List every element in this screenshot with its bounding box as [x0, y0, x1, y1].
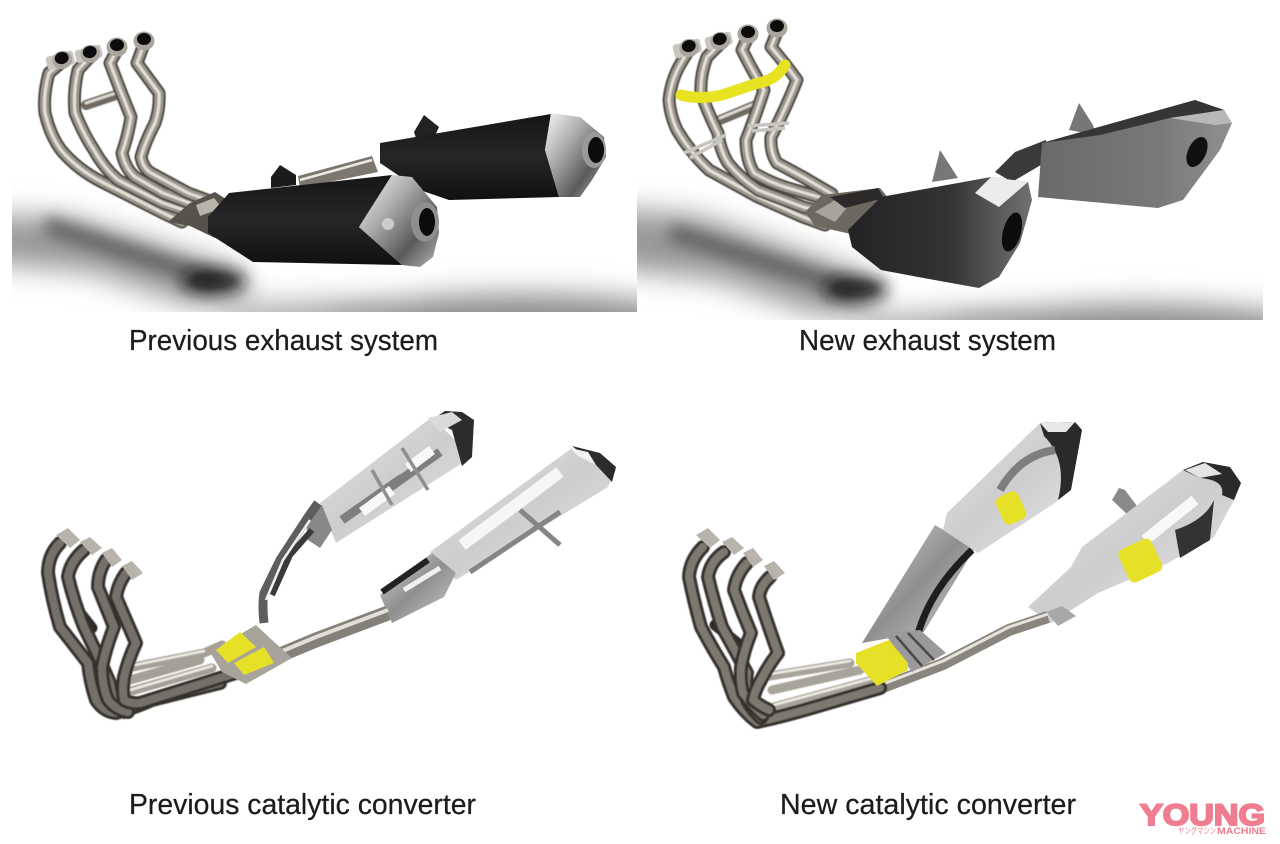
flanges — [696, 528, 785, 580]
yellow balance pipe — [681, 65, 785, 98]
clamp — [885, 630, 946, 672]
header pipes — [689, 547, 880, 722]
front muffler — [848, 150, 1032, 288]
caption: New exhaust system — [799, 325, 1056, 357]
header pipes — [48, 543, 236, 713]
connection box — [805, 188, 890, 236]
panel: previous exhaust system — [0, 32, 720, 362]
header pipes — [669, 32, 832, 225]
top silencer — [263, 411, 474, 623]
logo: Young Machine: MACHINE — [1217, 826, 1266, 836]
flanges — [56, 528, 143, 580]
lower silencer — [280, 446, 616, 655]
panel: previous catalytic converter — [48, 411, 616, 821]
logo: Young Machine: ヤングマシン — [1178, 825, 1216, 836]
floor shadow — [12, 197, 637, 312]
floor shadow — [637, 192, 1263, 320]
pipe clamps — [684, 123, 789, 158]
header pipes — [44, 44, 207, 222]
logo: Young Machine: YOUNG — [1140, 799, 1265, 832]
caption: Previous catalytic converter — [129, 789, 476, 821]
pipe flanges — [44, 32, 154, 73]
yellow catalysts — [216, 632, 274, 675]
rear muffler — [298, 113, 606, 200]
caption: New catalytic converter — [780, 789, 1076, 821]
pipe flanges — [671, 18, 788, 61]
catalyst casing — [210, 625, 292, 684]
rear muffler — [995, 100, 1232, 208]
yellow catalyst — [856, 640, 908, 686]
top silencer — [862, 422, 1082, 643]
panel: new exhaust system — [637, 18, 1263, 356]
front muffler — [168, 165, 439, 267]
panel: new catalytic converter — [689, 422, 1241, 821]
lower silencer — [875, 462, 1241, 690]
caption: Previous exhaust system — [129, 325, 438, 357]
